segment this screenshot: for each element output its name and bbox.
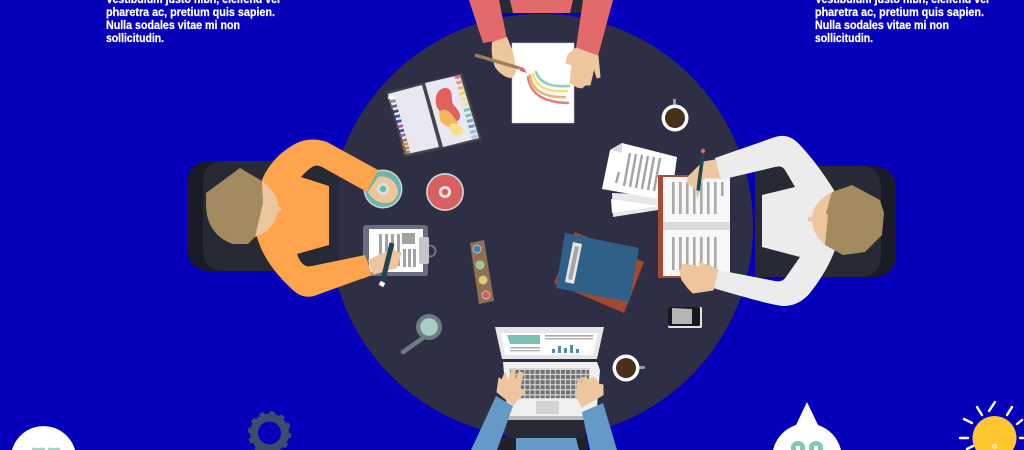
text lines — [379, 233, 416, 267]
right chair — [755, 166, 896, 277]
torso — [516, 438, 579, 450]
text block: top left: sollicitudin. — [106, 31, 164, 45]
paint blobs — [436, 88, 463, 135]
text block: top left: pharetra ac, pretium quis sapien. — [106, 5, 275, 19]
icon: sun — [960, 402, 1023, 450]
right hand — [575, 377, 603, 407]
text block: top right — [815, 0, 989, 45]
text block: top right: sollicitudin. — [815, 31, 873, 45]
open book — [658, 175, 730, 278]
right sleeve — [582, 403, 617, 450]
upper hand — [687, 160, 720, 188]
touchpad — [536, 401, 559, 414]
bottom chair — [498, 420, 588, 450]
papers — [602, 143, 677, 217]
laptop — [495, 327, 604, 420]
left chair — [187, 161, 338, 271]
lower hand — [680, 262, 718, 293]
right hand — [566, 48, 600, 88]
white body — [713, 136, 835, 306]
hair — [825, 185, 884, 255]
pen — [381, 243, 392, 286]
icon: white circle — [12, 426, 75, 450]
round table — [329, 14, 753, 438]
face — [255, 181, 278, 237]
right person — [680, 136, 884, 306]
nose — [277, 207, 281, 211]
bottom person arms — [471, 369, 617, 450]
hand — [368, 248, 402, 275]
base — [503, 362, 600, 420]
paint brush — [475, 55, 527, 73]
left sleeve — [471, 396, 513, 450]
hair — [206, 168, 263, 244]
palette book — [386, 73, 482, 157]
nose — [808, 217, 812, 221]
chart on screen — [507, 335, 593, 353]
colour swatch strip — [470, 240, 494, 304]
folder — [554, 232, 644, 313]
rainbow — [528, 72, 569, 103]
text block: top right: Nulla sodales vitae mi non — [815, 18, 949, 32]
teal plate — [364, 170, 402, 208]
torso and sleeves — [469, 0, 613, 56]
left hand — [492, 37, 516, 78]
phone — [668, 307, 702, 328]
icon: white droplet — [773, 402, 841, 450]
book text lines — [672, 182, 724, 270]
left person — [206, 140, 378, 297]
clip — [424, 246, 436, 256]
left lower sleeve tip — [357, 255, 372, 279]
coffee cup bottom — [612, 354, 645, 382]
top chair strip — [497, 0, 585, 13]
sheet of paper — [512, 43, 574, 123]
paper text lines — [616, 153, 660, 191]
face — [812, 192, 832, 245]
text block: top left: Nulla sodales vitae mi non — [106, 18, 240, 32]
coffee cup top — [662, 99, 688, 132]
text block: top left — [106, 0, 280, 45]
icon: gear — [250, 413, 290, 450]
clipboard — [363, 225, 436, 286]
paint swatches left — [388, 97, 410, 153]
text block: top right: pharetra ac, pretium quis sapien. — [815, 5, 984, 19]
paint swatches right — [455, 76, 478, 138]
top person — [469, 0, 613, 123]
red plate — [426, 173, 464, 211]
keyboard — [509, 368, 590, 399]
magnifier — [403, 314, 442, 352]
left hand — [497, 369, 525, 405]
pencil — [696, 149, 705, 199]
orange body — [257, 140, 378, 297]
